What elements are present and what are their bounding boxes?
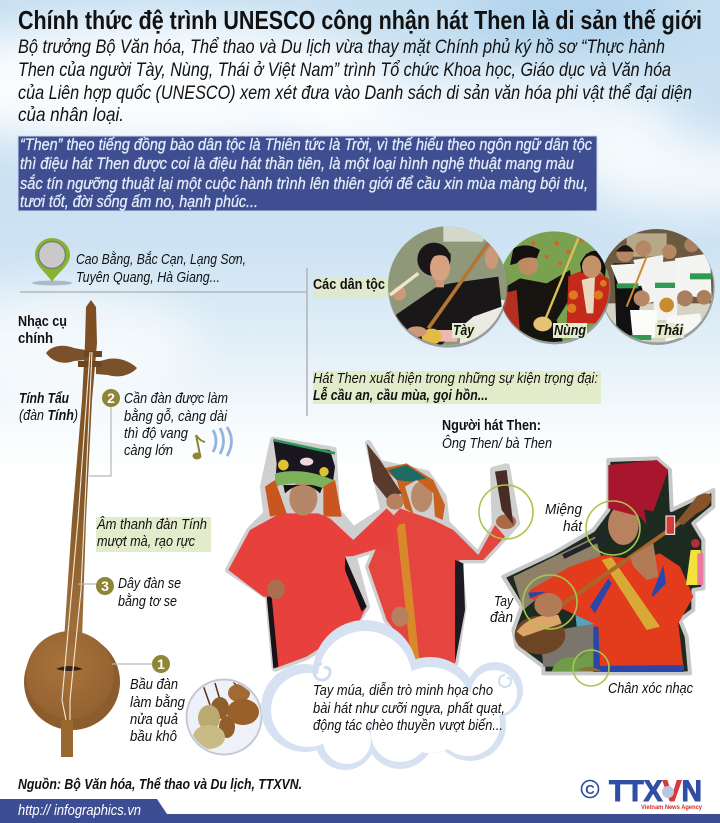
- labels: ethnic names: Thái: [656, 323, 684, 339]
- callout: sound: [96, 516, 211, 552]
- callout 3: strings: Dây đàn se: [118, 576, 181, 592]
- logo: copyright TTXVN: TTXVN: [609, 775, 702, 808]
- labels: singer body parts: hát: [563, 519, 583, 535]
- callout: occasions: [313, 371, 601, 404]
- cloud: [261, 620, 523, 770]
- labels: singer body parts: Miệng: [545, 502, 582, 518]
- callout 1: gourd body: 1: [157, 656, 165, 672]
- panel: definition of Then: “Then” theo tiếng đồng bào dân tộc là Thiên tức là Trời, vì thế hiểu theo ngôn ngữ dân tộc: [20, 136, 593, 154]
- icon: music note and sound waves: [192, 427, 232, 460]
- heading: singers: [442, 418, 552, 452]
- photo: Then singer man: [503, 458, 713, 673]
- footer bar: http:// infographics.vn: [18, 802, 141, 819]
- photo: Nùng: [497, 230, 613, 347]
- source: Nguồn: Bộ Văn hóa, Thể thao và Du lịch, TTXVN.: [18, 777, 302, 793]
- heading: singers: Người hát Then:: [442, 418, 541, 434]
- cloud caption: động tác chèo thuyền vượt biển...: [313, 718, 503, 734]
- labels: ethnic names: Tày: [453, 323, 475, 339]
- callout 3: strings: bằng tơ se: [118, 593, 177, 610]
- callout: occasions: Lễ cầu an, cầu mùa, gọi hồn...: [313, 387, 488, 404]
- label: ethnic groups: Các dân tộc: [313, 277, 385, 293]
- heading: main instrument: chính: [18, 331, 53, 347]
- callout 2: neck: Cần đàn được làm: [124, 391, 228, 407]
- callout 1: gourd body: nửa quả: [130, 712, 178, 728]
- callout: sound: mượt mà, rạo rực: [97, 534, 196, 550]
- photo: dried gourds: [186, 680, 262, 754]
- footer bar: [0, 799, 720, 823]
- callout 2: neck: 2: [107, 390, 115, 406]
- instrument name: (đàn Tính): [19, 408, 78, 424]
- callout 3: strings: 3: [101, 578, 109, 594]
- labels: singer body parts: [490, 502, 694, 697]
- panel: definition of Then: tươi tốt, đời sống ấm no, hạnh phúc...: [20, 193, 258, 211]
- callout 2: neck: [89, 389, 228, 476]
- labels: ethnic names: Nùng: [554, 323, 586, 339]
- callout 2: neck: thì độ vang: [124, 426, 188, 442]
- photo: Thái: [604, 229, 715, 345]
- panel: definition of Then: sắc tín ngưỡng thuật lại một cuộc hành trình lên thiên giới để cầu xin mùa màng bội thu,: [20, 174, 588, 193]
- callout 1: gourd body: [112, 655, 185, 745]
- logo: copyright TTXVN: Vietnam News Agency: [641, 805, 703, 811]
- location text: Cao Bằng, Bắc Cạn, Lạng Sơn,: [76, 251, 246, 268]
- photo: two women dancing: [228, 440, 517, 668]
- instrument: Tính lute: [24, 300, 137, 757]
- callout 1: gourd body: Bầu đàn: [130, 677, 178, 693]
- panel: definition of Then: [18, 136, 597, 211]
- intro text: của nhân loại.: [18, 104, 124, 126]
- labels: singer body parts: Chân xóc nhạc: [608, 681, 694, 697]
- callout 2: neck: càng lớn: [124, 443, 173, 459]
- instrument name: [19, 391, 78, 424]
- labels: singer body parts: Tay: [494, 594, 514, 610]
- callout: occasions: Hát Then xuất hiện trong những sự kiện trọng đại:: [313, 371, 598, 387]
- instrument name: Tính Tẩu: [19, 391, 69, 407]
- icon: location pin: [32, 238, 72, 286]
- callout 1: gourd body: làm bằng: [130, 694, 185, 711]
- logo: copyright TTXVN: C: [585, 782, 595, 797]
- cloud caption: [313, 682, 505, 734]
- labels: ethnic names: [452, 323, 684, 339]
- panel: definition of Then: thì điệu hát Then được coi là điệu hát thần tiên, là một loại hình nghệ thuật mang màu: [20, 155, 574, 173]
- heading: main instrument: Nhạc cụ: [18, 314, 67, 330]
- callout 2: neck: bằng gỗ, càng dài: [124, 408, 228, 425]
- heading: main instrument: [18, 314, 67, 347]
- callout 3: strings: [78, 576, 181, 610]
- callout: sound: Âm thanh đàn Tính: [96, 516, 207, 533]
- heading: singers: Ông Then/ bà Then: [442, 435, 552, 452]
- location text: Tuyên Quang, Hà Giang...: [76, 270, 220, 286]
- photo: Tày: [387, 225, 510, 350]
- highlight circles: [479, 485, 640, 686]
- location text: [76, 251, 246, 286]
- cloud caption: bài hát như cưỡi ngựa, phất quạt,: [313, 701, 505, 717]
- cloud caption: Tay múa, diễn trò minh họa cho: [313, 682, 493, 699]
- callout 1: gourd body: bầu khô: [130, 729, 177, 745]
- labels: singer body parts: đàn: [490, 610, 513, 626]
- intro text: [18, 36, 692, 126]
